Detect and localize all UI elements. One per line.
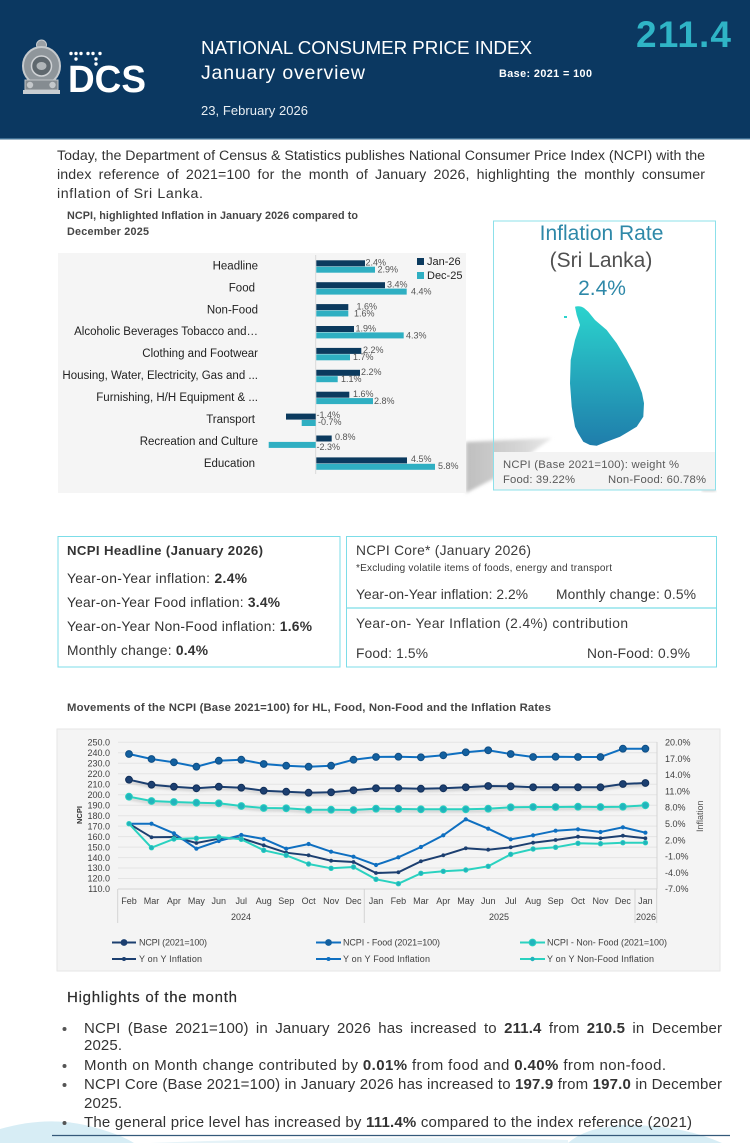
month labels: Oct	[571, 896, 585, 906]
panel: NCPI headline	[58, 536, 340, 667]
category labels: Food	[229, 282, 255, 294]
bullet 4: The general price level has increased by 111.4% compared to the index reference (2021)	[84, 1114, 692, 1131]
category labels: Furnishing, H/H Equipment & ...	[96, 392, 258, 404]
line chart legend: NCPI - Non- Food (2021=100)	[547, 938, 667, 948]
bar value labels: 1.9%	[356, 324, 376, 334]
panel: NCPI headline: NCPI Headline (January 2026)	[67, 543, 263, 558]
month labels: Apr	[167, 896, 181, 906]
line chart legend: Y on Y Inflation	[139, 954, 202, 964]
left axis labels: 140.0	[87, 853, 110, 863]
headline index value: 211.4	[636, 14, 731, 55]
weights note	[503, 459, 706, 486]
left axis labels: 170.0	[87, 821, 110, 831]
left axis labels: 190.0	[87, 800, 110, 810]
right axis labels: 5.0%	[665, 819, 686, 829]
left axis labels: 200.0	[87, 790, 110, 800]
left axis title: NCPI	[75, 806, 84, 824]
month labels: Aug	[256, 896, 272, 906]
panel: NCPI core and contribution: Non-Food: 0.9%	[587, 646, 690, 661]
intro paragraph: Today, the Department of Census & Statistics publishes National Consumer Price Index (NCPI) with the	[57, 148, 705, 164]
month labels: May	[188, 896, 205, 906]
bullet 1	[62, 1020, 722, 1054]
bar value labels: -2.3%	[316, 442, 340, 452]
category labels: Alcoholic Beverages Tobacco and…	[74, 326, 258, 338]
bar value labels: 1.6%	[353, 389, 374, 399]
series: NCPI - Non-Food	[129, 797, 645, 810]
weights note: Non-Food: 60.78%	[608, 474, 706, 486]
right axis labels: -1.0%	[665, 852, 689, 862]
line shadows	[129, 782, 645, 812]
month labels: Jul	[505, 896, 516, 906]
panel: inflation rate	[494, 221, 716, 490]
panel: NCPI headline: Year-on-Year Non-Food inflation: 1.6%	[67, 619, 312, 634]
right axis title: Inflation	[695, 800, 705, 832]
line chart legend: Y on Y Non-Food Inflation	[547, 954, 654, 964]
right axis labels: -4.0%	[665, 868, 689, 878]
month labels: Dec	[345, 896, 362, 906]
bullet 3	[62, 1076, 722, 1112]
bar chart heading: December 2025	[67, 226, 149, 238]
bar value labels: 4.5%	[411, 454, 432, 464]
bar chart legend: Jan-26	[427, 256, 461, 268]
month labels: Sep	[278, 896, 294, 906]
heading: inflation rate: Inflation Rate	[540, 222, 663, 245]
icon: national emblem	[23, 40, 60, 94]
right axis labels: 11.0%	[665, 786, 690, 796]
series: NCPI	[129, 780, 645, 793]
month labels: Jul	[236, 896, 247, 906]
line chart legend: Y on Y Food Inflation	[343, 954, 430, 964]
category labels: Recreation and Culture	[140, 436, 258, 448]
map of Sri Lanka	[564, 306, 644, 446]
panel: NCPI core and contribution: Year-on-Year inflation: 2.2%	[356, 587, 528, 602]
base note: Base: 2021 = 100	[499, 68, 592, 80]
value: 2.4%: 2.4%	[578, 277, 626, 300]
bar chart legend	[417, 256, 462, 282]
month labels: Mar	[413, 896, 429, 906]
highlights list	[62, 1020, 722, 1131]
month labels: 2026	[636, 912, 656, 922]
bar value labels: 2.4%	[366, 258, 386, 268]
bar chart heading	[67, 210, 358, 238]
bar value labels: 2.9%	[378, 264, 398, 274]
month labels: Mar	[144, 896, 159, 906]
bullet 2: Month on Month change contributed by 0.01% from food and 0.40% from non-food.	[84, 1057, 666, 1074]
subtitle: January overview	[201, 62, 366, 84]
intro paragraph: inflation of Sri Lanka.	[57, 186, 203, 202]
right axis labels: 2.0%	[665, 835, 686, 845]
right axis labels: 8.0%	[665, 803, 686, 813]
header banner	[0, 0, 750, 140]
month labels: Aug	[525, 896, 541, 906]
month labels: Jan	[369, 896, 383, 906]
panel shadow edge	[702, 490, 716, 492]
month labels: Jun	[212, 896, 226, 906]
month labels: Nov	[323, 896, 340, 906]
bar value labels: 1.7%	[353, 352, 374, 362]
bar chart legend: Dec-25	[427, 270, 462, 282]
panel: NCPI core and contribution	[346, 536, 716, 667]
logo: DCS wordmark: DCS	[68, 59, 146, 101]
left axis labels: 230.0	[87, 758, 110, 768]
bar chart heading: NCPI, highlighted Inflation in January 2026 compared to	[67, 210, 358, 222]
bullet 3: NCPI Core (Base 2021=100) in January 2026 has increased to 197.9 from 197.0 in December	[84, 1076, 722, 1093]
bar value labels: 1.6%	[356, 302, 377, 312]
month labels: Feb	[121, 896, 137, 906]
right axis labels: 17.0%	[665, 754, 691, 764]
panel: NCPI core and contribution: *Excluding volatile items of foods, energy and transport	[356, 563, 612, 574]
panel: NCPI headline: Year-on-Year Food inflation: 3.4%	[67, 595, 280, 610]
left axis labels: 220.0	[87, 769, 110, 779]
month labels: Nov	[592, 896, 609, 906]
bullet 1: NCPI (Base 2021=100) in January 2026 has increased to 211.4 from 210.5 in December	[84, 1020, 722, 1037]
line chart legend	[112, 938, 667, 964]
category labels	[62, 260, 258, 470]
line chart heading: Movements of the NCPI (Base 2021=100) for HL, Food, Non-Food and the Inflation Rates	[67, 702, 551, 714]
panel: NCPI core and contribution: NCPI Core* (January 2026)	[356, 543, 531, 558]
intro paragraph	[57, 148, 705, 202]
month labels: Feb	[391, 896, 406, 906]
month labels: 2024	[231, 912, 251, 922]
month labels: 2025	[489, 912, 509, 922]
line chart legend: NCPI - Food (2021=100)	[343, 938, 440, 948]
left axis labels: 110.0	[88, 884, 110, 894]
line chart legend: NCPI (2021=100)	[139, 938, 207, 948]
series: Y on Y Non-Food Inflation	[129, 824, 645, 884]
month labels: Dec	[615, 896, 631, 906]
bottom decorative waves	[0, 1121, 722, 1143]
bar value labels: 1.6%	[354, 308, 375, 318]
bars: January 2026	[286, 260, 407, 463]
month labels	[121, 896, 656, 922]
panel: NCPI core and contribution: Food: 1.5%	[356, 646, 428, 661]
series: NCPI - Food	[129, 749, 645, 767]
series: Y on Y Inflation	[129, 824, 645, 873]
bar value labels: -1.4%	[316, 410, 340, 420]
right axis labels: 14.0%	[665, 770, 691, 780]
bullet 1: 2025.	[84, 1037, 122, 1054]
left axis labels: 130.0	[87, 863, 110, 873]
bar value labels	[316, 258, 459, 471]
bar value labels: 3.4%	[387, 280, 408, 290]
series: Y on Y Food Inflation	[129, 819, 645, 865]
panel: line chart	[57, 729, 720, 971]
bar value labels: 0.8%	[335, 432, 356, 442]
left axis labels: 250.0	[87, 738, 110, 748]
bar value labels: 5.8%	[438, 461, 459, 471]
weights note: Food: 39.22%	[503, 474, 575, 486]
category labels: Transport	[206, 414, 256, 426]
highlights heading: Highlights of the month	[67, 989, 237, 1006]
category labels: Education	[204, 458, 255, 470]
left axis labels	[87, 738, 110, 894]
bar value labels: 4.3%	[406, 330, 427, 340]
bullet 3: 2025.	[84, 1095, 122, 1112]
bar value labels: 2.2%	[363, 345, 384, 355]
left axis labels: 210.0	[87, 779, 110, 789]
subheading: Sri Lanka: (Sri Lanka)	[550, 249, 652, 272]
bars: December 2025	[269, 267, 435, 470]
month labels: Jun	[481, 896, 495, 906]
left axis labels: 120.0	[87, 874, 110, 884]
left axis labels: 180.0	[87, 811, 110, 821]
month labels: Oct	[302, 896, 316, 906]
month labels: Jan	[638, 896, 653, 906]
bar value labels: 4.4%	[411, 286, 432, 296]
left axis labels: 160.0	[87, 832, 110, 842]
panel: bar chart	[58, 253, 466, 493]
right axis labels	[665, 738, 691, 894]
panel shadow	[466, 438, 552, 493]
panel: NCPI headline: Monthly change: 0.4%	[67, 643, 208, 658]
panel: NCPI core and contribution: Monthly change: 0.5%	[556, 587, 696, 602]
right axis labels: 20.0%	[665, 738, 691, 748]
panel: NCPI core and contribution: Year-on- Year Inflation (2.4%) contribution	[356, 616, 628, 631]
bar value labels: -0.7%	[318, 417, 342, 427]
weights note: NCPI (Base 2021=100): weight %	[503, 459, 679, 471]
date: 23, February 2026	[201, 103, 308, 118]
category labels: Non-Food	[207, 304, 258, 316]
bar value labels: 1.1%	[341, 374, 362, 384]
category labels: Housing, Water, Electricity, Gas and ...	[62, 370, 258, 382]
category labels: Clothing and Footwear	[142, 348, 258, 360]
category labels: Headline	[213, 260, 258, 272]
intro paragraph: index reference of 2021=100 for the month of January 2026, highlighting the monthly consumer	[57, 167, 705, 183]
panel: NCPI headline: Year-on-Year inflation: 2.4%	[67, 571, 247, 586]
month labels: Apr	[436, 896, 450, 906]
left axis labels: 150.0	[87, 842, 110, 852]
right axis labels: -7.0%	[665, 884, 689, 894]
bar value labels: 2.8%	[374, 396, 395, 406]
title: NATIONAL CONSUMER PRICE INDEX	[201, 37, 532, 58]
left axis labels: 240.0	[87, 748, 110, 758]
month labels: May	[457, 896, 475, 906]
month labels: Sep	[548, 896, 564, 906]
bar value labels: 2.2%	[361, 367, 382, 377]
